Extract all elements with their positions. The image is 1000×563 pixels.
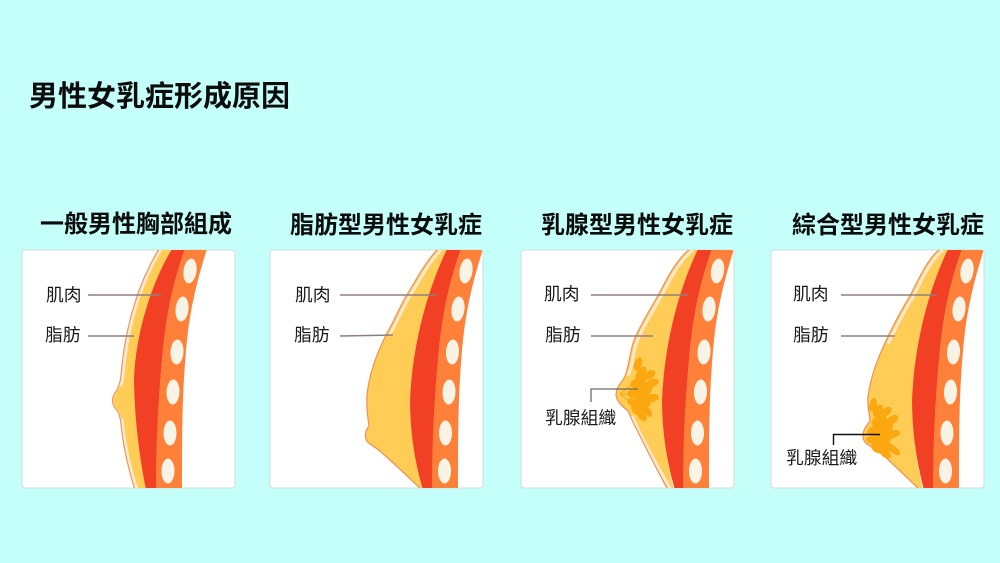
illustration: normal chest cross-section <box>113 249 207 490</box>
panel: glandular type <box>521 212 734 490</box>
panel: normal male chest <box>22 211 235 490</box>
heading: normal: 一般男性胸部組成 <box>40 211 232 238</box>
leader line: muscle <box>591 294 688 296</box>
label: muscle: 肌肉 <box>544 284 580 304</box>
label: fat: 脂肪 <box>45 325 81 345</box>
leader line: muscle <box>88 294 161 296</box>
leader line: fat <box>340 335 393 336</box>
label: fat: 脂肪 <box>793 325 829 345</box>
illustration: fatty chest cross-section <box>365 249 483 490</box>
heading: glandular type: 乳腺型男性女乳症 <box>541 212 733 239</box>
icon: mammary gland cluster <box>620 356 660 423</box>
label: muscle: 肌肉 <box>793 284 829 304</box>
label: muscle: 肌肉 <box>46 285 82 305</box>
illustration: combined chest cross-section <box>863 249 984 490</box>
card: combined type <box>771 250 984 488</box>
label: fat: 脂肪 <box>294 325 330 345</box>
card: normal <box>22 250 235 488</box>
leader line: fat <box>841 335 895 337</box>
label: gland: 乳腺組織 <box>545 408 616 428</box>
leader line: fat <box>591 335 653 337</box>
title: 男性女乳症形成原因 <box>29 80 290 113</box>
illustration: glandular chest cross-section <box>616 249 734 490</box>
label: muscle: 肌肉 <box>295 285 331 305</box>
card: fatty type <box>270 250 483 488</box>
leader line: gland <box>834 434 880 445</box>
panel: combined type <box>771 212 984 490</box>
leader line: fat <box>88 335 134 337</box>
label: fat: 脂肪 <box>545 325 581 345</box>
heading: fatty type: 脂肪型男性女乳症 <box>290 212 482 239</box>
leader line: muscle <box>841 294 937 296</box>
leader line: gland <box>591 389 638 402</box>
icon: mammary gland cluster <box>865 397 902 461</box>
leader line: muscle <box>340 294 437 296</box>
heading: combined type: 綜合型男性女乳症 <box>792 212 984 239</box>
label: gland: 乳腺組織 <box>786 448 857 468</box>
panel: fatty type <box>270 212 483 490</box>
card: glandular type <box>521 250 734 488</box>
